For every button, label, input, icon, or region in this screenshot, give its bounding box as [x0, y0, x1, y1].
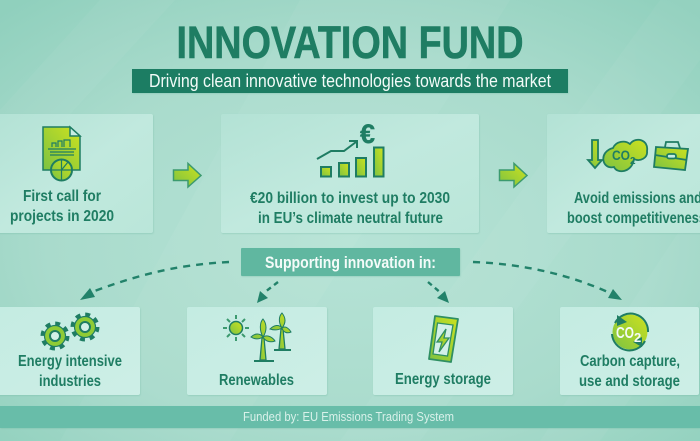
- label: in EU’s climate neutral future: [258, 210, 443, 227]
- icon: battery: [429, 316, 458, 362]
- label: [18, 353, 122, 390]
- subtitle banner: Driving clean innovative technologies towards the market: [149, 70, 551, 91]
- panel: energy intensive industries: [0, 307, 140, 395]
- label: Carbon capture,: [580, 353, 680, 370]
- arrow: second to third: [500, 164, 527, 187]
- icon: down arrow, CO2 cloud, briefcase: CO: [612, 148, 630, 163]
- label: [250, 190, 450, 227]
- panel: avoid emissions: [547, 114, 700, 233]
- icon: down arrow, CO2 cloud, briefcase: 2: [630, 156, 636, 167]
- label: Renewables: [219, 372, 294, 389]
- dashed arrow: to renewables: [257, 282, 278, 303]
- panel: first call: [0, 114, 153, 233]
- panel: investment: [221, 114, 479, 233]
- icon: sun and wind turbines: [223, 313, 291, 361]
- dashed arrow: to carbon capture: [473, 262, 622, 300]
- label: use and storage: [579, 373, 680, 390]
- label: €20 billion to invest up to 2030: [250, 190, 450, 207]
- icon: CO2 recycling circle: [612, 314, 648, 350]
- icon: growth chart with euro: €: [360, 119, 375, 149]
- dashed arrow: to energy storage: [428, 282, 449, 303]
- supporting innovation banner: Supporting innovation in:: [265, 253, 436, 272]
- icon: gears: [43, 315, 97, 348]
- panel: renewables: [187, 307, 327, 395]
- supporting innovation banner: [241, 248, 460, 276]
- arrow: first to second: [174, 164, 201, 187]
- label: industries: [39, 373, 101, 390]
- label: projects in 2020: [10, 208, 114, 225]
- footer band: Funded by: EU Emissions Trading System: [243, 409, 454, 424]
- label: [567, 190, 700, 227]
- panel: carbon capture: [560, 307, 699, 395]
- icon: document with chart: [43, 127, 80, 180]
- panel: energy storage: [373, 307, 513, 395]
- footer band: [0, 406, 700, 428]
- title: INNOVATION FUND: [176, 17, 524, 68]
- label: First call for: [23, 188, 101, 205]
- label: Energy storage: [395, 371, 491, 388]
- icon: CO2 recycling circle: 2: [634, 330, 641, 345]
- label: [579, 353, 680, 390]
- icon: down arrow, CO2 cloud, briefcase: [588, 140, 688, 171]
- label: [10, 188, 114, 225]
- icon: CO2 recycling circle: CO: [616, 325, 634, 342]
- dashed arrow: to energy intensive industries: [80, 262, 229, 300]
- icon: growth chart with euro: [317, 119, 384, 176]
- label: Energy intensive: [18, 353, 122, 370]
